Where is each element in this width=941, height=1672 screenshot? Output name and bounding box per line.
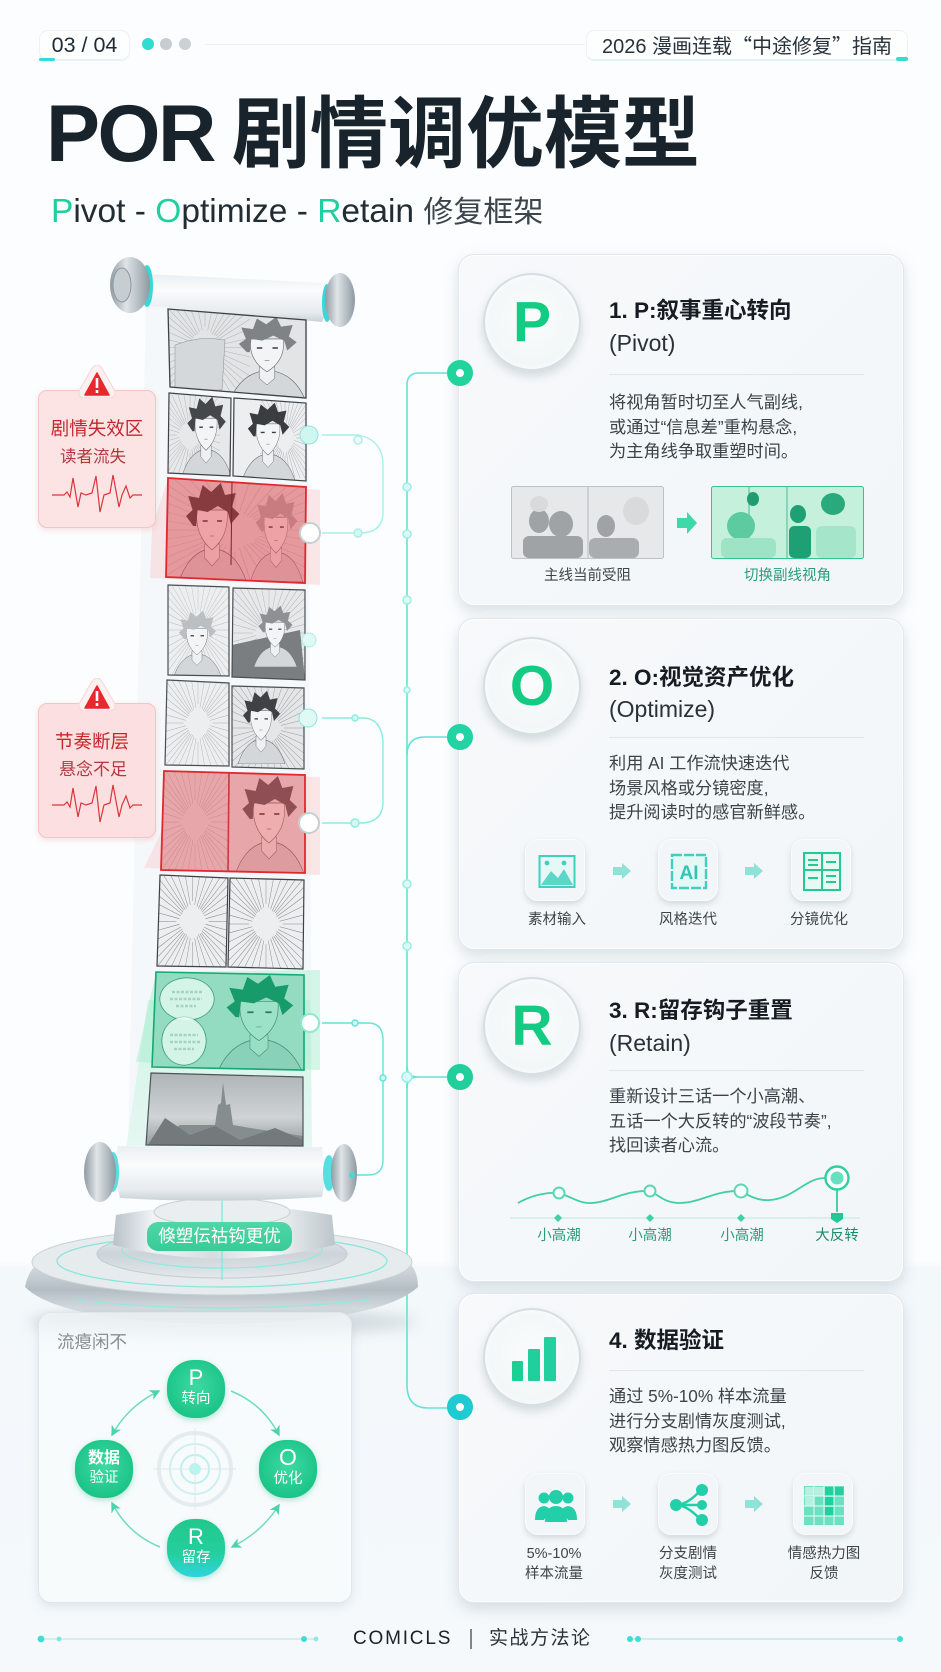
- page counter pill: [39, 30, 130, 61]
- footer tagline: 实战方法论: [489, 1628, 592, 1649]
- icon: glass R: [483, 977, 581, 1075]
- callout subtext: 悬念不足: [59, 760, 127, 779]
- card description: 五话一个大反转的“波段节奏”,: [609, 1110, 831, 1130]
- card heading: 2. O:视觉资产优化: [609, 665, 794, 690]
- caption: branch test: 分支剧情: [659, 1546, 717, 1562]
- card description: 观察情感热力图反馈。: [609, 1435, 781, 1455]
- glass plate: failure zone two: [144, 772, 320, 875]
- subtitle: Pivot - Optimize - Retain 修复框架: [51, 193, 543, 230]
- progress dots: [142, 38, 191, 50]
- icon: arrow: [613, 1496, 631, 1512]
- title: [46, 89, 700, 179]
- caption: style iteration: 风格迭代: [659, 912, 717, 928]
- node: R: R: [188, 1524, 204, 1549]
- card subheading: (Optimize): [609, 696, 715, 722]
- node: R: [167, 1519, 225, 1577]
- caption: sample share: [525, 1546, 583, 1582]
- node: data validation: 数据: [88, 1450, 120, 1467]
- callout glass body: [38, 703, 156, 838]
- caption: main storyline: 主线当前受阻: [544, 568, 631, 584]
- brand: COMICLS: [353, 1628, 452, 1649]
- node: O: [259, 1440, 317, 1498]
- icon: sample users: [525, 1473, 585, 1535]
- callout heading: 节奏断层: [55, 731, 129, 752]
- card description: 提升阅读时的感官新鲜感。: [609, 802, 815, 822]
- header bar: [39, 30, 908, 61]
- title: 剧情调优模型: [232, 90, 700, 178]
- card: data validation: [458, 1293, 904, 1603]
- panel: loop diagram: [38, 1312, 352, 1603]
- series tag pill: 2026 漫画连载“中途修复”指南: [602, 30, 892, 59]
- connector: retention bracket: [322, 1020, 386, 1175]
- icon: glass R: R: [511, 994, 553, 1058]
- caption: side storyline: 切换副线视角: [744, 568, 831, 584]
- card heading: 4. 数据验证: [609, 1328, 724, 1353]
- manga panel 9, landscape: [145, 1072, 305, 1148]
- footer line left: [38, 1636, 318, 1642]
- connector nodes on card edges: [447, 360, 473, 1420]
- callout heading: 剧情失效区: [51, 418, 143, 439]
- glass plate: retention zone: [136, 970, 320, 1070]
- card description: 场景风格或分镜密度,: [609, 778, 768, 798]
- icon: glass O: O: [510, 654, 554, 718]
- card description: 利用 AI 工作流快速迭代: [609, 753, 789, 773]
- thumbnail: main storyline: [511, 486, 664, 559]
- icon: branching tree: [658, 1473, 718, 1535]
- manga panel 3, red highlight: [160, 475, 310, 585]
- icon: arrow: [745, 863, 763, 879]
- connector: first failure bracket: [322, 435, 383, 537]
- caption: heatmap feedback: [788, 1545, 860, 1582]
- node: P: P: [189, 1365, 203, 1390]
- manga panel 6, red highlight: [158, 768, 308, 876]
- footer line right: [627, 1636, 903, 1642]
- heartbeat line: [52, 784, 142, 822]
- footer: [38, 1628, 903, 1649]
- card: O optimize: [458, 618, 904, 950]
- card description: 重新设计三话一个小高潮、: [609, 1086, 815, 1106]
- panel hotspots: [299, 426, 320, 1032]
- scroll paper: [126, 300, 312, 1148]
- pedestal label: 倏塑伝祜钩更优: [158, 1226, 281, 1246]
- node: O: O: [279, 1444, 297, 1470]
- card: R retain: [458, 962, 904, 1282]
- icon: warning triangle: [78, 678, 116, 711]
- card description: 或通过“信息差”重构悬念,: [609, 416, 797, 436]
- callout subtext: 读者流失: [60, 448, 126, 466]
- label: small climax 1: 小高潮: [537, 1228, 581, 1244]
- heartbeat line: [52, 474, 142, 512]
- pedestal label: [147, 1222, 292, 1251]
- icon: storyboard grid: [791, 839, 851, 901]
- node: R: 留存: [182, 1550, 210, 1566]
- connector: main trunk line: [402, 373, 448, 1408]
- icon: glass bar chart: [483, 1308, 581, 1406]
- icon: heatmap grid: [793, 1473, 853, 1535]
- card description: [609, 1386, 787, 1455]
- icon: image input: [525, 839, 585, 901]
- card description: 将视角暂时切至人气副线,: [609, 392, 803, 412]
- glass plate: failure zone one: [150, 478, 320, 585]
- node: data validation: [75, 1440, 133, 1498]
- caption: branch test: 灰度测试: [659, 1566, 717, 1582]
- node: data validation: 验证: [90, 1470, 118, 1486]
- icon: arrow: [745, 1496, 763, 1512]
- manga panel 4: [165, 582, 308, 682]
- icon: glass P: P: [513, 290, 551, 354]
- bottom roller: [84, 1142, 357, 1202]
- thumbnail: side storyline: [711, 486, 864, 559]
- scroll illustration with connectors and pedestal: [25, 257, 448, 1409]
- card description: [609, 392, 803, 461]
- panel label: 流瘪闲不: [57, 1332, 127, 1352]
- icon: warning triangle: [78, 365, 116, 398]
- card description: [609, 1086, 831, 1155]
- icon: arrow: [613, 863, 631, 879]
- icon: AI chip: AI: [680, 863, 698, 884]
- pedestal base: [25, 1150, 418, 1336]
- card description: [609, 753, 815, 822]
- card subheading: (Retain): [609, 1030, 691, 1056]
- card description: 进行分支剧情灰度测试,: [609, 1410, 786, 1430]
- manga panel 7: [155, 873, 306, 972]
- icon: AI chip: [658, 839, 718, 901]
- cycle arrows and centre radar: [111, 1390, 280, 1548]
- icon: glass P: [483, 273, 581, 371]
- label: small climax 3: 小高潮: [720, 1228, 764, 1244]
- manga panel 1: [167, 308, 307, 399]
- callout glass body: [38, 390, 156, 528]
- callout: rhythm break: [36, 678, 158, 842]
- caption: branch test: [659, 1545, 717, 1582]
- caption: sample share: 5%-10%: [527, 1546, 581, 1562]
- card heading: 3. R:留存钩子重置: [609, 998, 793, 1023]
- manga panel 8, green highlight: [150, 970, 306, 1072]
- wave chart: [510, 1165, 860, 1223]
- card subheading: (Pivot): [609, 330, 675, 356]
- icon: arrow: [677, 512, 697, 534]
- card: P pivot: [458, 254, 904, 606]
- icon: glass O: [483, 637, 581, 735]
- caption: input: 素材输入: [528, 912, 586, 928]
- manga panel 5: [163, 678, 306, 772]
- label: big twist: 大反转: [815, 1228, 859, 1244]
- node: O: 优化: [274, 1471, 302, 1487]
- node: P: [167, 1360, 225, 1418]
- label: small climax 2: 小高潮: [628, 1228, 672, 1244]
- caption: heatmap feedback: 情感热力图: [788, 1546, 860, 1562]
- caption: sample share: 样本流量: [525, 1566, 583, 1582]
- card heading: 1. P:叙事重心转向: [609, 298, 792, 323]
- node: P: 转向: [182, 1391, 210, 1407]
- title: POR: [46, 89, 214, 179]
- top roller: [110, 257, 355, 327]
- callout: plot failure zone: [36, 365, 158, 532]
- page counter pill: 03 / 04: [52, 33, 117, 57]
- caption: heatmap feedback: 反馈: [810, 1566, 838, 1582]
- card description: 通过 5%-10% 样本流量: [609, 1386, 787, 1406]
- card description: 找回读者心流。: [609, 1135, 729, 1155]
- connector: second failure bracket: [322, 715, 383, 827]
- manga panel 2: [167, 392, 307, 482]
- card description: 为主角线争取重塑时间。: [609, 441, 798, 461]
- caption: panel optimize: 分镜优化: [790, 912, 848, 928]
